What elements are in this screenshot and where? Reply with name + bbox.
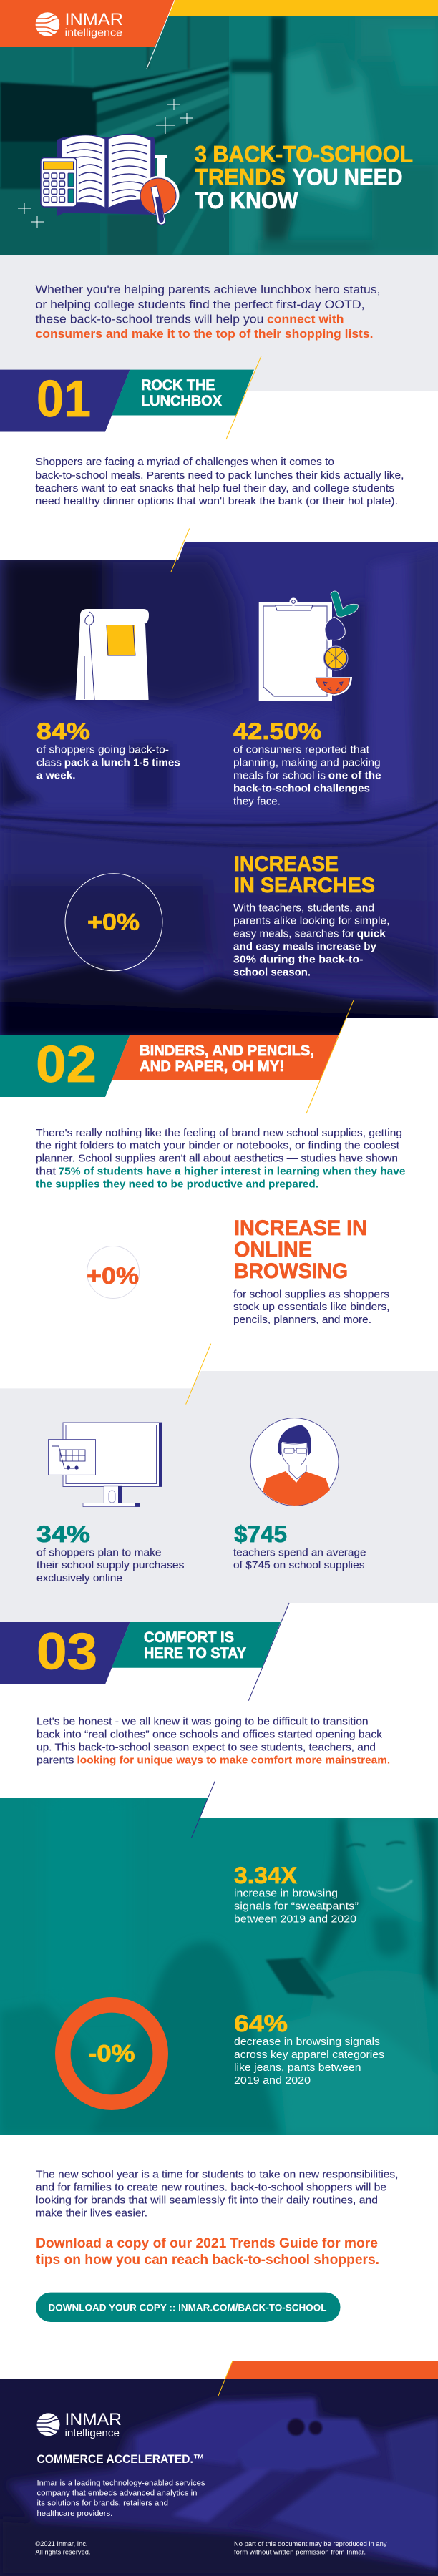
text: intro paragraph: Whether you're helping parents achieve lunchbox hero status,: [36, 283, 381, 296]
accent line navy: [171, 528, 190, 572]
stat: 34%: of shoppers plan to make: [36, 1547, 162, 1558]
section header 02: 02: [36, 1036, 97, 1093]
text: increase in online browsing: INCREASE IN: [234, 1216, 367, 1240]
section header 01: LUNCHBOX: [141, 393, 222, 409]
stat: 84%: of shoppers going back-to-: [36, 744, 169, 756]
button: download: [36, 2293, 341, 2322]
section header 02: BINDERS, AND PENCILS,: [140, 1043, 314, 1059]
text: legal notice: No part of this document may be reproduced in any: [234, 2540, 387, 2547]
stat: 3.34X: between 2019 and 2020: [234, 1914, 356, 1926]
logo: Inmar footer: intelligence: [64, 2427, 120, 2439]
title: TO KNOW: [195, 187, 298, 213]
stat: 64%: decrease in browsing signals: [234, 2036, 380, 2048]
accent line gray: [186, 1344, 211, 1405]
sparkles: [18, 99, 193, 228]
text: school supplies paragraph: the supplies they need to be productive and prepared.: [36, 1179, 318, 1191]
text: closing paragraph: [36, 2170, 398, 2220]
text: company description: healthcare providers.: [37, 2509, 112, 2518]
text: school supplies paragraph: 75% of students have a higher interest in learning when they have: [59, 1166, 405, 1178]
stat: 42.50%: of consumers reported that: [233, 744, 369, 756]
title: TRENDS: [195, 165, 286, 190]
text: lunchbox paragraph: need healthy dinner options that won't break the bank (or their hot plate).: [36, 496, 398, 507]
stat: $745: teachers spend an average: [233, 1547, 366, 1558]
stat: 64%: like jeans, pants between: [234, 2062, 361, 2074]
stat: 64%: across key apparel categories: [234, 2049, 384, 2061]
accent line: white: [147, 0, 175, 69]
text: copyright: All rights reserved.: [36, 2548, 90, 2555]
text: comfort paragraph: back into “real clothes” once schools and offices started opening back: [36, 1729, 383, 1740]
text: school supplies paragraph: planner. School supplies aren't all about aesthetics — studies have shown: [36, 1153, 398, 1165]
stat circle: +0% browsing: +0%: [87, 1263, 139, 1289]
accent line 01: [226, 356, 261, 439]
text: lunchbox paragraph: [36, 457, 404, 507]
text: copyright: [36, 2540, 90, 2555]
stat: 84%: 84%: [36, 718, 90, 744]
section header 01: [0, 370, 254, 432]
stat: 34%: exclusively online: [36, 1573, 122, 1584]
stat: 42.50%: one of the: [328, 770, 381, 781]
text: company description: company that embeds advanced analytics in: [37, 2489, 198, 2497]
donut chart: -0%: -0%: [88, 2041, 135, 2067]
stat: 34%: 34%: [36, 1521, 90, 1547]
accent line teal: [191, 1781, 215, 1838]
text: download call to action: [36, 2235, 379, 2268]
stat: 42.50%: [233, 718, 381, 807]
stat: 84%: [36, 718, 180, 781]
section header 03: [0, 1622, 281, 1684]
text: increase in searches: INCREASE: [234, 852, 339, 876]
logo: Inmar header: INMAR: [64, 10, 123, 29]
text: increase in online browsing: [233, 1216, 389, 1326]
text: legal notice: form without written permission from Inmar.: [234, 2548, 366, 2555]
logo: Inmar header: intelligence: [64, 27, 122, 39]
text: comfort paragraph: up. This back-to-school season expect to see students, teachers, and: [36, 1742, 376, 1753]
text: increase in online browsing: pencils, planners, and more.: [233, 1314, 371, 1326]
icon: lunch bag: [76, 609, 149, 700]
orange logo banner: [0, 0, 175, 47]
stat: 3.34X: [234, 1863, 359, 1926]
stat: $745: of $745 on school supplies: [233, 1560, 365, 1571]
text: closing paragraph: The new school year is a time for students to take on new responsibilities,: [36, 2170, 398, 2181]
stat: 42.50%: planning, making and packing: [233, 757, 381, 769]
text: lunchbox paragraph: teachers want to eat snacks that help fuel their day, and college students: [36, 483, 394, 494]
text: increase in searches: With teachers, students, and: [233, 903, 374, 914]
logo: Inmar header: [35, 10, 123, 39]
navy photo panel: [0, 537, 438, 1038]
text: school supplies paragraph: that: [36, 1166, 56, 1178]
button: download: DOWNLOAD YOUR COPY :: INMAR.COM/BACK-TO-SCHOOL: [49, 2303, 326, 2313]
tagline: COMMERCE ACCELERATED.™: [37, 2452, 205, 2466]
title: YOU NEED: [293, 165, 403, 190]
text: intro paragraph: these back-to-school trends will help you: [36, 312, 263, 326]
text: download call to action: Download a copy of our 2021 Trends Guide for more: [36, 2235, 378, 2251]
text: intro paragraph: or helping college students find the perfect first-day OOTD,: [36, 298, 364, 311]
text: closing paragraph: make their lives easier.: [36, 2208, 147, 2220]
text: copyright: ©2021 Inmar, Inc.: [36, 2540, 87, 2547]
text: increase in searches: quick: [357, 928, 386, 940]
text: legal notice: [234, 2540, 387, 2555]
accent line 03: [248, 1603, 289, 1701]
section header 03: HERE TO STAY: [144, 1645, 246, 1662]
panel: gray supplies: [0, 1371, 438, 1622]
logo: Inmar footer: INMAR: [64, 2410, 122, 2429]
text: intro paragraph: consumers and make it to the top of their shopping lists.: [36, 327, 374, 341]
text: lunchbox paragraph: Shoppers are facing a myriad of challenges when it comes to: [36, 457, 334, 468]
text: school supplies paragraph: [36, 1128, 405, 1191]
text: download call to action: tips on how you can reach back-to-school shoppers.: [36, 2252, 379, 2268]
stat circle: +0% searches: [65, 874, 162, 971]
text: school supplies paragraph: There's really nothing like the feeling of brand new school supplies, getting: [36, 1128, 402, 1139]
text: school supplies paragraph: the right folders to match your binder or notebooks, or finding the coolest: [36, 1141, 399, 1152]
stat: 42.50%: meals for school is: [233, 770, 326, 781]
text: intro paragraph: connect with: [267, 312, 344, 326]
text: increase in searches: and easy meals increase by: [233, 941, 377, 952]
text: company description: Inmar is a leading technology-enabled services: [37, 2479, 205, 2487]
stat: 64%: 2019 and 2020: [234, 2075, 311, 2087]
panel: intro gray: [0, 255, 438, 391]
stat: 64%: 64%: [234, 2011, 288, 2036]
stat: 34%: [36, 1521, 185, 1584]
stat: $745: $745: [234, 1521, 287, 1547]
text: company description: its solutions for brands, retailers and: [37, 2499, 168, 2508]
stat: 84%: pack a lunch 1-5 times: [64, 757, 180, 769]
section header 02: [0, 1035, 339, 1097]
icon: teacher portrait: [250, 1418, 339, 1506]
teal photo panel: [0, 1792, 438, 2143]
text: comfort paragraph: looking for unique ways to make comfort more mainstream.: [77, 1755, 390, 1766]
stat: 3.34X: increase in browsing: [234, 1888, 338, 1900]
text: increase in searches: IN SEARCHES: [234, 874, 375, 897]
accent line 02: [306, 1000, 354, 1113]
title: [195, 142, 413, 213]
text: increase in online browsing: for school supplies as shoppers: [233, 1289, 389, 1300]
footer photo panel: [0, 2379, 438, 2576]
hero photo background: [0, 16, 438, 255]
icon: book, calculator and flask: [41, 134, 179, 225]
section header 02: AND PAPER, OH MY!: [140, 1058, 284, 1075]
text: increase in searches: school season.: [233, 967, 311, 978]
text: intro paragraph: [36, 283, 381, 341]
accent line footer: [218, 2361, 233, 2396]
text: increase in searches: parents alike looking for simple,: [233, 916, 389, 927]
text: increase in online browsing: BROWSING: [234, 1259, 348, 1283]
stat: 42.50%: back-to-school challenges: [233, 783, 370, 794]
stat circle: +0% browsing: [87, 1246, 139, 1298]
text: increase in searches: 30% during the back-to-: [233, 954, 364, 965]
text: comfort paragraph: Let's be honest - we all knew it was going to be difficult to transition: [36, 1716, 369, 1727]
stat: 42.50%: they face.: [233, 796, 281, 807]
text: lunchbox paragraph: back-to-school meals. Parents need to pack lunches their kids actually like,: [36, 470, 404, 482]
icon: clipboard with fruit: [259, 591, 358, 701]
section header 03: 03: [36, 1624, 97, 1681]
text: comfort paragraph: [36, 1716, 390, 1766]
orange footer band: [225, 2361, 438, 2379]
stat: 42.50%: 42.50%: [233, 718, 321, 744]
text: closing paragraph: and for families to create new routines. back-to-school shoppers will be: [36, 2182, 386, 2194]
stat: 3.34X: signals for “sweatpants”: [234, 1901, 359, 1913]
section header 01: ROCK THE: [141, 377, 215, 394]
section header 01: 01: [36, 371, 91, 428]
stat: 84%: class: [36, 757, 62, 769]
text: company description: [37, 2479, 205, 2518]
top yellow band: [163, 0, 438, 16]
stat: 3.34X: 3.34X: [234, 1863, 298, 1888]
text: increase in online browsing: stock up essentials like binders,: [233, 1302, 389, 1313]
stat: 34%: their school supply purchases: [36, 1560, 185, 1571]
icon: monitor with cart: [49, 1423, 162, 1507]
donut chart: -0%: [63, 2005, 160, 2102]
section header 03: COMFORT IS: [144, 1629, 234, 1646]
text: increase in searches: easy meals, searches for: [233, 928, 355, 940]
stat: 64%: [234, 2011, 384, 2087]
text: closing paragraph: looking for brands that will seamlessly fit into their daily routines, and: [36, 2195, 378, 2207]
stat circle: +0% searches: +0%: [87, 909, 140, 935]
logo: Inmar footer: [36, 2410, 122, 2439]
text: increase in online browsing: ONLINE: [234, 1238, 312, 1262]
stat: 84%: a week.: [36, 770, 76, 781]
text: comfort paragraph: parents: [36, 1755, 74, 1766]
stat: $745: [233, 1521, 366, 1571]
text: increase in searches: [233, 852, 389, 978]
title: 3 BACK-TO-SCHOOL: [195, 142, 413, 167]
